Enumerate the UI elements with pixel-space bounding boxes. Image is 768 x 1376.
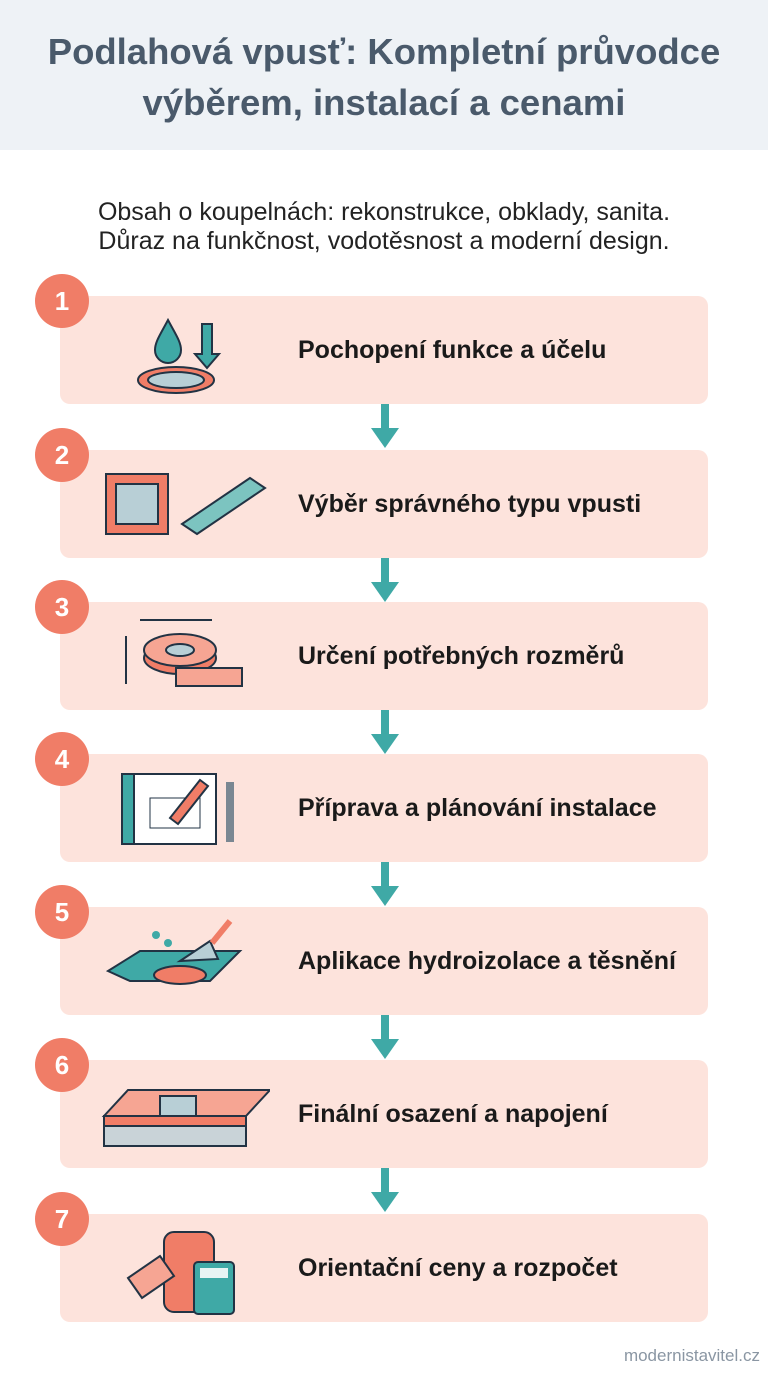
number 1 <box>35 274 89 328</box>
label: Určení potřebných rozměrů <box>298 642 624 670</box>
number 3 <box>35 580 89 634</box>
panel: step 1 <box>60 296 708 404</box>
arrow <box>371 558 399 602</box>
title: výběrem, instalací a cenami <box>143 82 625 123</box>
subtitle: Obsah o koupelnách: rekonstrukce, obklady, sanita. <box>98 198 670 226</box>
title <box>48 31 720 123</box>
number 6 <box>35 1038 89 1092</box>
footer: modernistavitel.cz <box>624 1346 760 1365</box>
number 2 <box>35 428 89 482</box>
arrow <box>371 404 399 448</box>
panel: step 3 <box>60 602 708 710</box>
panel: step 7 <box>60 1214 708 1322</box>
number 7: 7 <box>55 1204 69 1234</box>
icon: waterproofing <box>106 919 242 985</box>
panel: step 5 <box>60 907 708 1015</box>
panel: step 2 <box>60 450 708 558</box>
icon: floor section <box>102 1089 270 1147</box>
number 5 <box>35 885 89 939</box>
label: Finální osazení a napojení <box>298 1100 608 1128</box>
icon: tape measure <box>125 619 243 687</box>
header band <box>0 0 768 150</box>
number 2: 2 <box>55 440 69 470</box>
label: Aplikace hydroizolace a těsnění <box>298 947 676 975</box>
subtitle <box>98 198 670 255</box>
number 4: 4 <box>55 744 69 774</box>
subtitle: Důraz na funkčnost, vodotěsnost a moderní design. <box>98 227 670 255</box>
icon: drop and drain <box>137 318 222 394</box>
arrow <box>371 1015 399 1059</box>
number 7 <box>35 1192 89 1246</box>
number 3: 3 <box>55 592 69 622</box>
number 5: 5 <box>55 897 69 927</box>
label: Výběr správného typu vpusti <box>298 490 641 518</box>
arrow <box>371 862 399 906</box>
title: Podlahová vpusť: Kompletní průvodce <box>48 31 720 72</box>
arrow <box>371 710 399 754</box>
icon: plan and wrench <box>121 773 234 845</box>
label: Pochopení funkce a účelu <box>298 336 606 364</box>
icon: drain types <box>105 473 267 536</box>
arrow <box>371 1168 399 1212</box>
number 1: 1 <box>55 286 69 316</box>
panel: step 6 <box>60 1060 708 1168</box>
number 6: 6 <box>55 1050 69 1080</box>
number 4 <box>35 732 89 786</box>
icon: coins and calculator <box>126 1231 235 1315</box>
panel: step 4 <box>60 754 708 862</box>
label: Příprava a plánování instalace <box>298 794 656 822</box>
label: Orientační ceny a rozpočet <box>298 1254 618 1282</box>
